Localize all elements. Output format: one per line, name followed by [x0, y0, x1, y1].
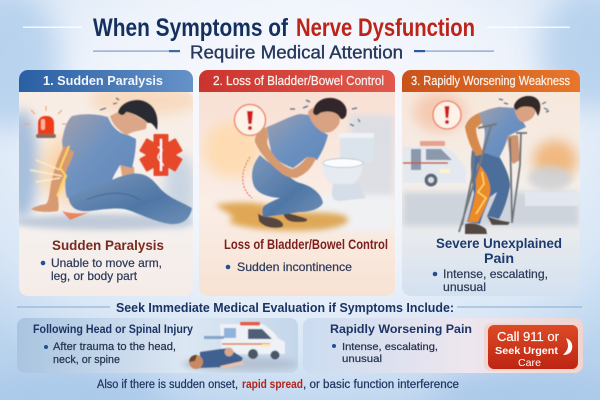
panel 2 header: 2. Loss of Bladder/Bowel Control	[213, 74, 384, 88]
icon: phone	[563, 338, 572, 355]
man: arms	[255, 127, 316, 178]
panel: severe unexplained pain	[402, 70, 580, 296]
man: back crutch	[510, 133, 527, 223]
section heading: seek immediate evaluation: Seek Immediate Medical Evaluation if Symptoms Include:	[116, 300, 454, 315]
text: unable to move	[41, 256, 162, 283]
illustration: ambulance and injured person	[182, 322, 298, 371]
text: after trauma: After trauma to the head,	[53, 341, 176, 353]
icon: alert exclamation	[234, 104, 266, 136]
man: left arm with pain	[31, 146, 74, 212]
man: legs in jeans	[68, 174, 192, 224]
text: intense escalating: unusual	[443, 280, 486, 294]
subtitle: Require Medical Attention	[190, 42, 403, 62]
illustration: man crouching by toilet	[204, 98, 395, 231]
icon: toilet	[323, 133, 374, 201]
panel: sudden paralysis	[19, 70, 193, 296]
button: call 911	[484, 323, 581, 371]
heading: severe unexplained pain: Severe Unexplained	[436, 235, 562, 251]
man: right forearm	[120, 164, 135, 176]
text: after trauma	[44, 341, 176, 366]
man: left arm	[465, 113, 484, 156]
panel 2 header	[199, 70, 395, 92]
icon: ambulance	[403, 141, 466, 186]
man: jeans	[252, 155, 323, 217]
heading: severe unexplained pain	[436, 235, 562, 266]
injured person	[189, 348, 244, 369]
title: When Symptoms of	[93, 14, 289, 42]
man: t-shirt	[267, 114, 328, 168]
button: call 911: Call 911 or	[497, 330, 559, 344]
title: Nerve Dysfunction	[296, 14, 475, 42]
heading: head or spinal injury: Following Head or Spinal Injury	[33, 322, 193, 336]
illustration: man collapsed with paralysis	[19, 92, 193, 233]
man: jeans	[467, 150, 510, 224]
panel 1 header	[19, 70, 193, 92]
button: call 911: Seek Urgent	[495, 345, 559, 357]
heading: loss of bladder bowel control: Loss of Bladder/Bowel Control	[224, 237, 388, 252]
panel 3 header	[402, 70, 580, 92]
text: intense escalating unusual: unusual	[342, 353, 382, 365]
text: intense escalating unusual: Intense, escalating,	[342, 341, 438, 353]
button: call 911: Care	[518, 357, 541, 369]
puddle	[215, 202, 348, 231]
title	[23, 14, 570, 42]
man: head and hair	[308, 105, 340, 133]
icon: medical star of life	[139, 134, 183, 176]
text: intense escalating	[433, 267, 548, 294]
panel: rapidly worsening pain	[303, 318, 583, 373]
text: sudden incontinence: Sudden incontinence	[237, 260, 352, 274]
heading: severe unexplained pain: Pain	[484, 250, 514, 266]
icon: alert exclamation	[433, 101, 461, 129]
heading: rapidly worsening pain: Rapidly Worsening Pain	[330, 322, 472, 336]
text: unable to move: Unable to move arm,	[51, 256, 162, 270]
man: t-shirt	[479, 107, 526, 158]
icon: red siren	[24, 106, 68, 138]
pain glow on leg	[468, 163, 490, 222]
panel 1 header: 1. Sudden Paralysis	[43, 74, 163, 88]
panel: following head or spinal injury	[17, 318, 298, 373]
footer note: rapid spread	[242, 379, 303, 391]
footer note	[97, 379, 459, 391]
text: unable to move: leg, or body part	[51, 269, 138, 283]
text: intense escalating: Intense, escalating,	[443, 267, 548, 281]
man: shoes	[465, 223, 487, 234]
illustration: man on crutches with ambulance	[403, 92, 579, 234]
footer note: , or basic function interference	[303, 379, 459, 391]
heading: sudden paralysis: Sudden Paralysis	[52, 237, 164, 253]
text: after trauma: neck, or spine	[53, 354, 120, 366]
man: right arm	[507, 135, 520, 164]
text: intense escalating unusual	[332, 341, 438, 365]
man: shoes	[258, 213, 283, 228]
man: front crutch	[459, 124, 497, 232]
man: neck and head	[110, 110, 147, 135]
panel: loss of bladder or bowel control	[199, 70, 395, 296]
panel 3 header: 3. Rapidly Worsening Weakness	[411, 74, 570, 88]
ambulance	[204, 322, 285, 360]
footer note: Also if there is sudden onset,	[97, 379, 238, 391]
man: torso in t-shirt	[62, 114, 136, 198]
man: head and hair	[514, 101, 536, 122]
